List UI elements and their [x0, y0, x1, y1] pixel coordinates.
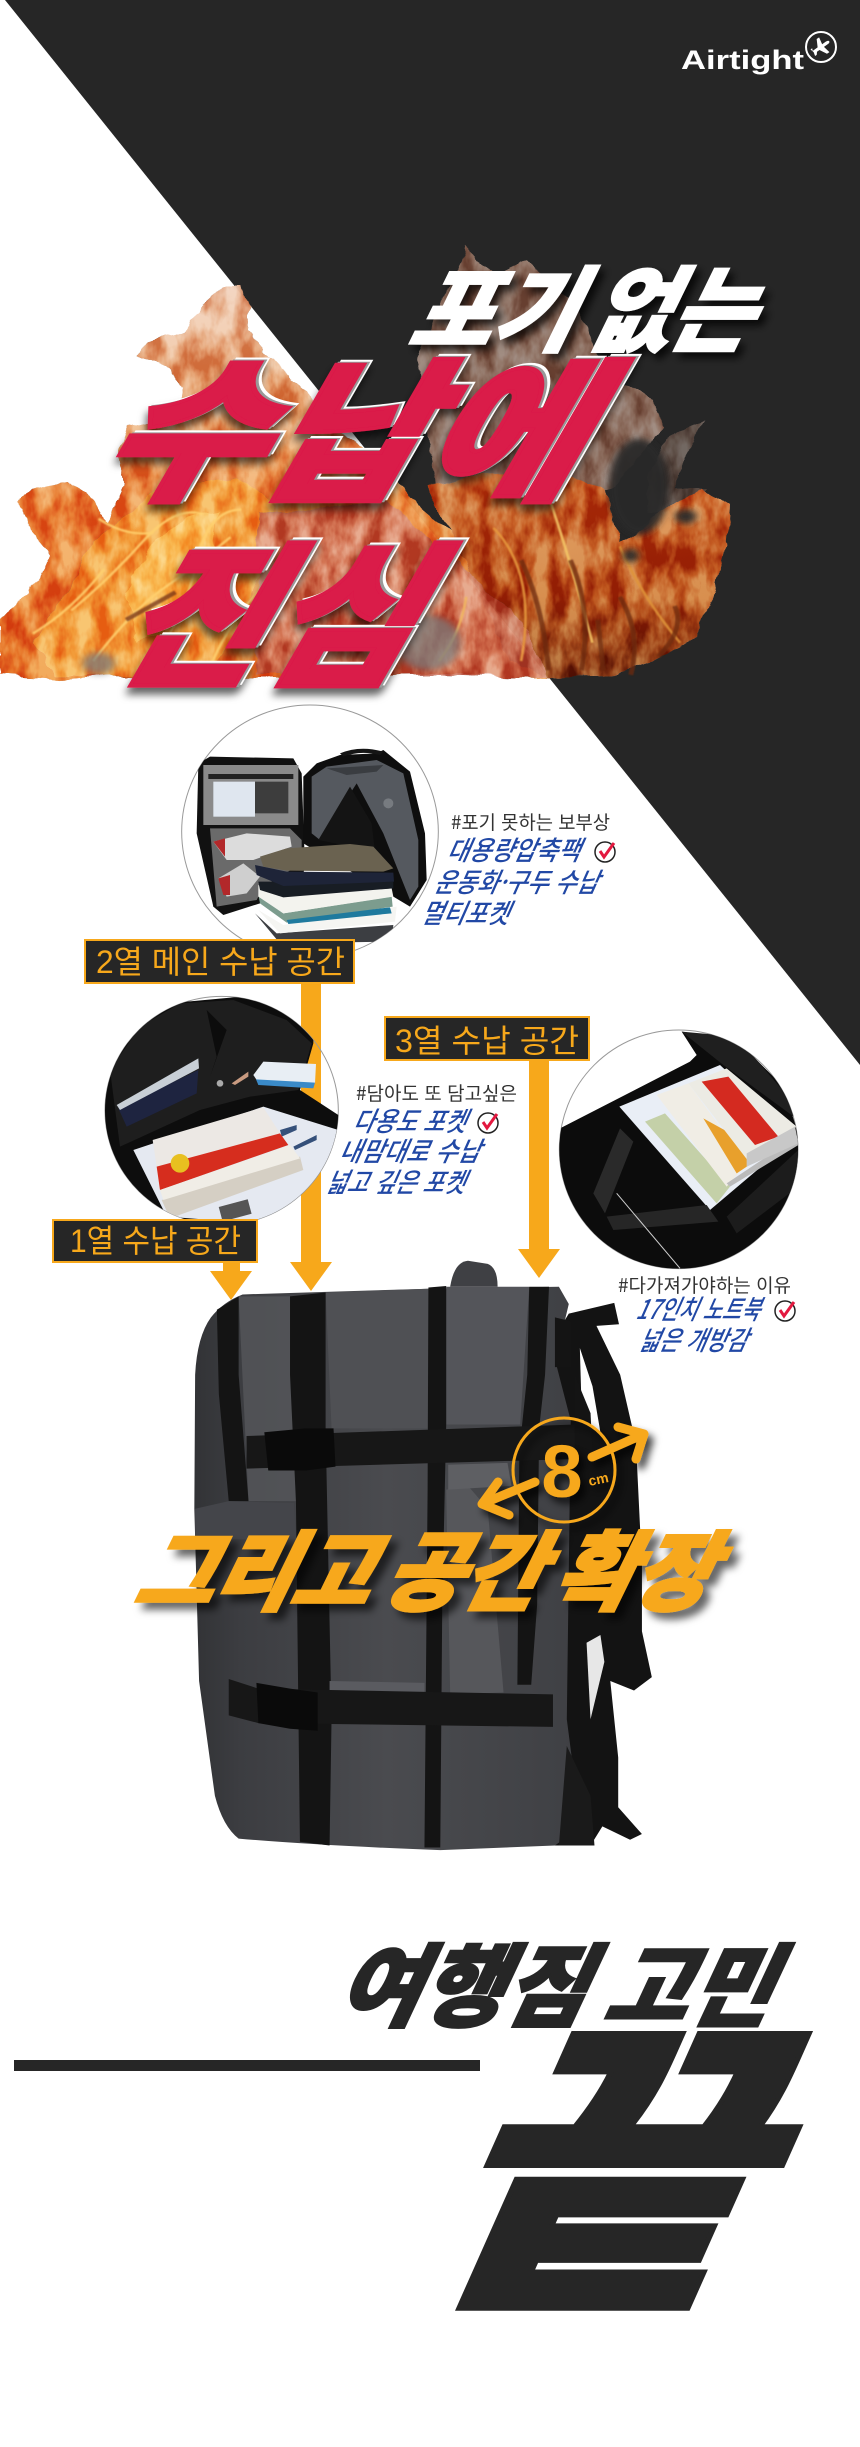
shoulder strap	[555, 1303, 652, 1846]
caption: 포기 못하는 보부상: 멀티포켓	[416, 892, 522, 932]
zips	[217, 1286, 593, 1847]
caption: 포기 못하는 보부상: #포기 못하는 보부상	[451, 808, 610, 835]
icon: check	[478, 1113, 498, 1133]
caption: 다가져가야하는 이유: 넓은 개방감	[634, 1319, 760, 1359]
caption: 담아도 또 담고싶은: 넓고 깊은 포켓	[321, 1161, 478, 1201]
caption: 포기 못하는 보부상	[416, 808, 615, 932]
divider bar	[14, 2060, 480, 2071]
heading: 포기 없는: 포기 없는	[393, 237, 800, 371]
photo circle: open bag with clothes	[182, 705, 438, 958]
label: 1열 수납 공간: 1열 수납 공간	[70, 1223, 241, 1259]
caption: 포기 못하는 보부상: 운동화·구두 수납	[429, 861, 611, 901]
caption: 담아도 또 담고싶은: #담아도 또 담고싶은	[356, 1079, 517, 1106]
callout: 8cm expansion: cm	[587, 1469, 610, 1489]
icon: check	[775, 1301, 795, 1321]
straps and buckles	[229, 1425, 575, 1731]
callout: 8cm expansion	[482, 1418, 644, 1522]
caption: 담아도 또 담고싶은: 다용도 포켓	[348, 1100, 479, 1140]
brand logo: Airtight	[681, 32, 836, 75]
heading: 수납에: 수납에	[68, 310, 674, 532]
top handle	[450, 1261, 498, 1287]
heading: 수납에: 수납에	[74, 307, 680, 529]
arrow: 3열	[518, 1060, 560, 1278]
label: 1열 수납 공간	[53, 1220, 257, 1300]
heading: 여행짐 고민: 여행짐 고민	[321, 1915, 816, 2046]
arrow: 1열	[210, 1262, 252, 1300]
callout: 8cm expansion: 8	[541, 1430, 583, 1513]
dark diagonal background	[5, 0, 860, 1065]
icon: plane in circle	[806, 32, 836, 62]
label: 3열 수납 공간: 3열 수납 공간	[395, 1023, 579, 1059]
pocket	[446, 1486, 504, 1694]
heading: 진심: 진심	[85, 493, 507, 717]
dark hollows	[609, 438, 697, 562]
flame illustration	[0, 248, 730, 679]
lighter compartment panels	[239, 1296, 296, 1501]
caption: 다가져가야하는 이유: 17인치 노트북	[631, 1288, 773, 1328]
arrow: 2열	[290, 983, 332, 1291]
heading: 진심: 진심	[88, 491, 510, 715]
label: 2열 메인 수납 공간: 2열 메인 수납 공간	[96, 944, 345, 980]
main body	[194, 1287, 579, 1850]
caption: 다가져가야하는 이유: #다가져가야하는 이유	[618, 1271, 791, 1298]
caption: 포기 못하는 보부상: 대용량압축팩	[442, 829, 593, 869]
icon: check	[595, 842, 615, 862]
caption: 다가져가야하는 이유	[618, 1271, 795, 1359]
caption: 담아도 또 담고싶은: 내맘대로 수납	[334, 1130, 493, 1170]
caption: 담아도 또 담고싶은	[321, 1079, 517, 1201]
heading: 끝: 끝	[384, 1929, 860, 2371]
heading: 그리고 공간 확장: 그리고 공간 확장	[120, 1504, 755, 1629]
photo circle: laptop compartment	[550, 1030, 803, 1273]
arrow: expansion double-headed	[482, 1427, 644, 1515]
heading: 수납에: 수납에	[71, 309, 677, 531]
brand logo: Airtight: Airtight	[681, 45, 804, 75]
heading: 진심: 진심	[82, 494, 504, 718]
backpack side view	[194, 1261, 652, 1850]
photo circle: front pocket with book	[104, 996, 339, 1220]
